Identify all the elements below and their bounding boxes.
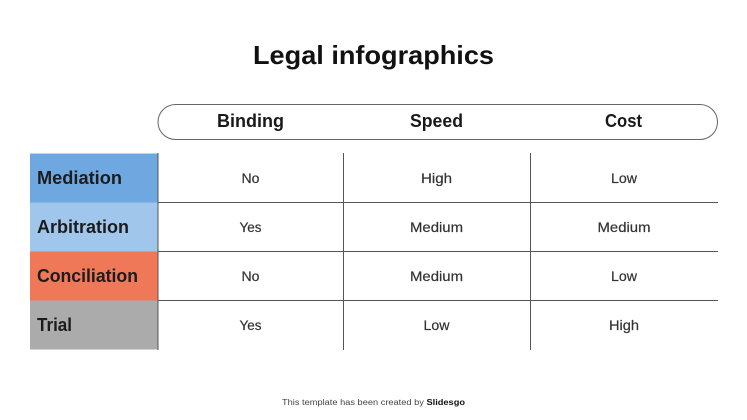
heading: Cost: Cost [605,111,642,131]
row values: Arbitration: Medium [410,220,463,235]
row label: Arbitration [30,202,158,252]
row label: Conciliation: Conciliation [37,266,138,286]
heading: Speed: Speed [410,111,463,131]
row values: Arbitration [240,220,650,235]
row values: Conciliation: No [242,269,260,284]
header pill [158,104,718,140]
row label: Mediation: Mediation [37,168,122,188]
row values: Mediation: High [421,171,452,186]
row values: Trial [240,318,639,333]
table grid lines [158,153,718,350]
title: Legal infographics [253,40,494,70]
row values: Trial: Low [424,318,450,333]
row values: Conciliation [242,269,637,284]
row values: Conciliation: Low [611,269,637,284]
row label: Arbitration: Arbitration [37,217,129,237]
row label: Trial [30,300,158,350]
heading: Binding: Binding [217,111,284,131]
row values: Trial: High [609,318,639,333]
row label: Trial: Trial [37,315,72,335]
row label: Mediation [30,154,158,202]
row values: Mediation: Low [611,171,637,186]
row values: Arbitration: Yes [240,220,262,235]
row values: Mediation: No [242,171,260,186]
row values: Mediation [242,171,637,186]
row values: Trial: Yes [240,318,262,333]
footer credit: This template has been created by Slidesgo [282,398,465,407]
row label: Conciliation [30,252,158,300]
row values: Arbitration: Medium [598,220,650,235]
row values: Conciliation: Medium [410,269,463,284]
